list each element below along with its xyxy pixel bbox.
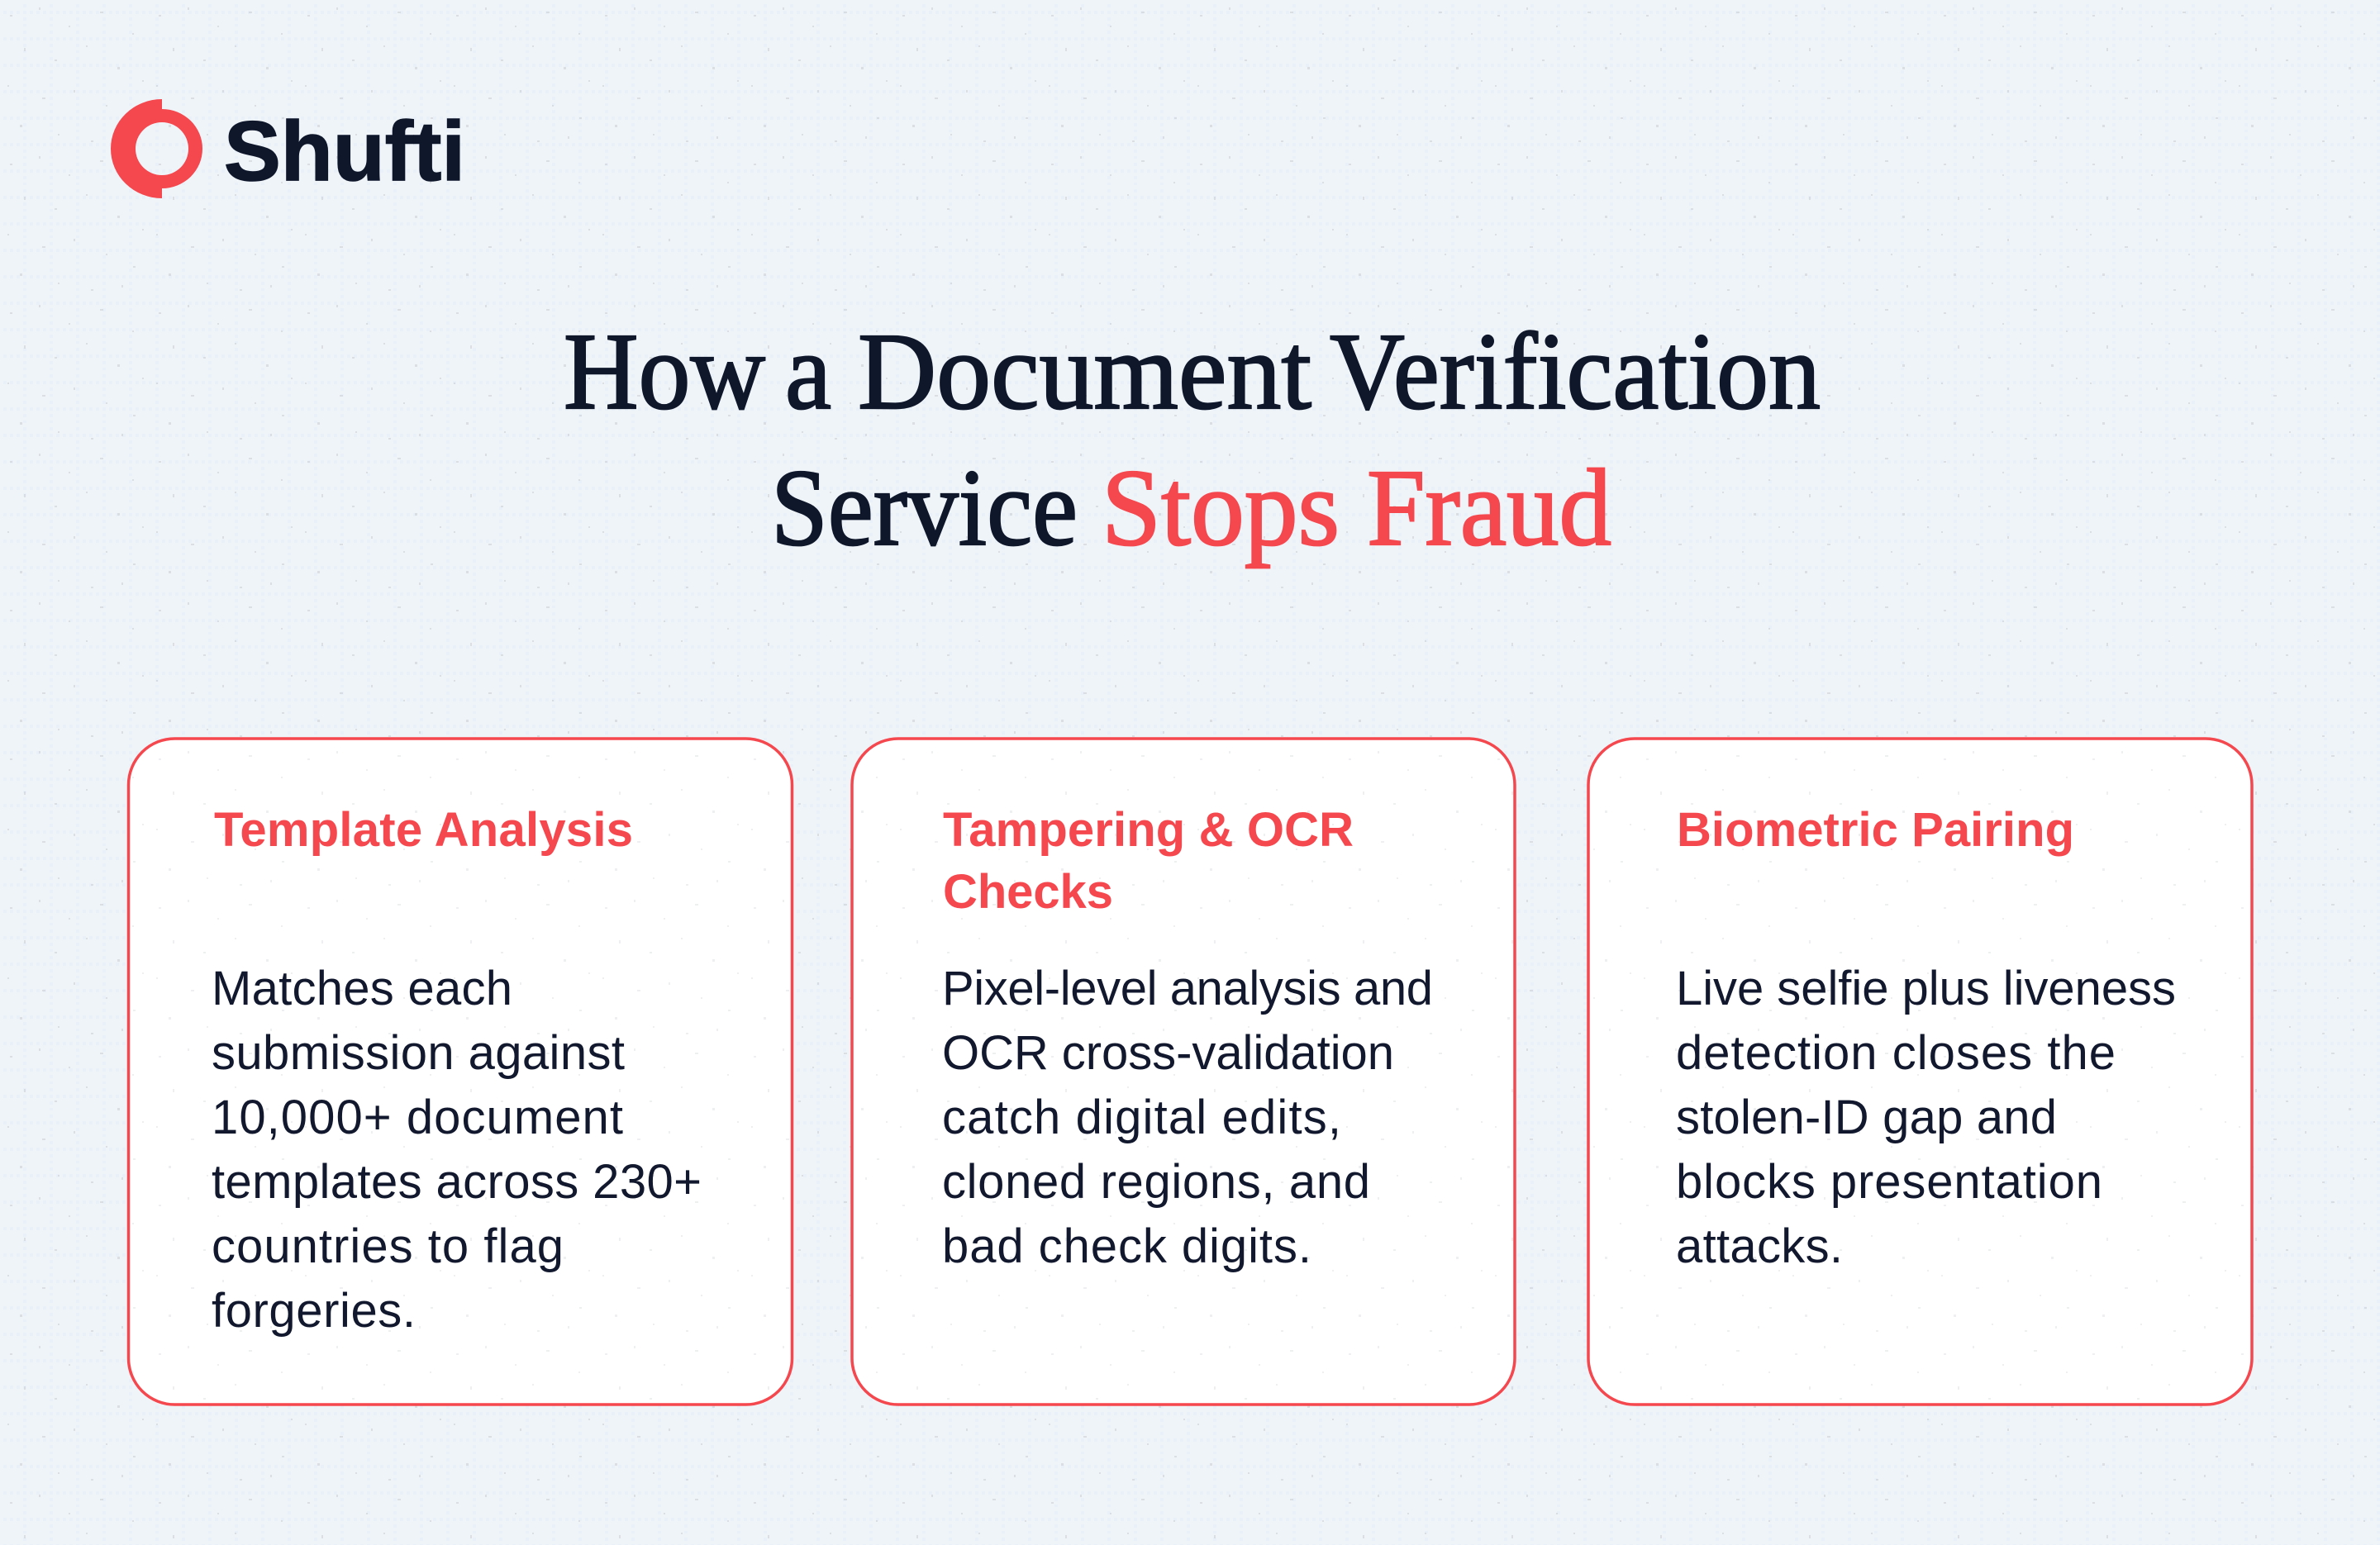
panel: Biometric Pairing: [1588, 739, 2252, 1405]
text block: Biometric description: stolen-ID gap and: [1676, 1091, 2057, 1144]
text block: Biometric description: attacks.: [1676, 1219, 1843, 1273]
panel: Template Analysis: [129, 739, 792, 1405]
icon: Shufti ring: [111, 99, 202, 198]
text block: Tampering description: [942, 962, 1433, 1273]
title: [564, 310, 1821, 568]
text block: Template Analysis description: 10,000+ document: [212, 1091, 623, 1144]
text block: Tampering description: cloned regions, and: [942, 1155, 1370, 1209]
title: Verification: [1330, 310, 1821, 432]
heading: Tampering & OCR Checks: Tampering & OCR: [943, 803, 1354, 857]
text block: Template Analysis description: templates across 230+: [212, 1155, 702, 1209]
text block: Biometric description: blocks presentation: [1676, 1155, 2102, 1209]
title: Service: [771, 446, 1078, 568]
text block: Template Analysis description: forgeries.: [212, 1284, 416, 1338]
title: Document: [858, 310, 1311, 432]
title: a: [785, 310, 831, 432]
text block: Biometric description: Live selfie plus liveness: [1676, 962, 2176, 1015]
heading: Tampering & OCR Checks: [943, 803, 1354, 919]
title: How: [564, 310, 765, 432]
text block: Biometric description: [1676, 962, 2176, 1273]
text block: Template Analysis description: countries to flag: [212, 1219, 564, 1273]
heading: Tampering & OCR Checks: Checks: [943, 865, 1113, 919]
text block: Template Analysis description: submission against: [212, 1026, 625, 1080]
text block: Tampering description: catch digital edits,: [942, 1091, 1341, 1144]
heading: Template Analysis: Template Analysis: [214, 803, 633, 857]
panel: Tampering & OCR Checks: [852, 739, 1515, 1405]
heading: Biometric Pairing: Biometric Pairing: [1677, 803, 2074, 857]
title: Fraud: [1367, 446, 1611, 568]
logo: Shufti: [111, 99, 465, 198]
text block: Tampering description: OCR cross-validation: [942, 1026, 1394, 1080]
text block: Tampering description: Pixel-level analysis and: [942, 962, 1433, 1015]
text block: Biometric description: detection closes the: [1676, 1026, 2116, 1080]
text block: Template Analysis description: Matches each: [212, 962, 512, 1015]
title: Stops: [1102, 446, 1340, 568]
logo wordmark: Shufti: [224, 104, 465, 198]
text block: Tampering description: bad check digits.: [942, 1219, 1311, 1273]
text block: Template Analysis description: [212, 962, 702, 1338]
